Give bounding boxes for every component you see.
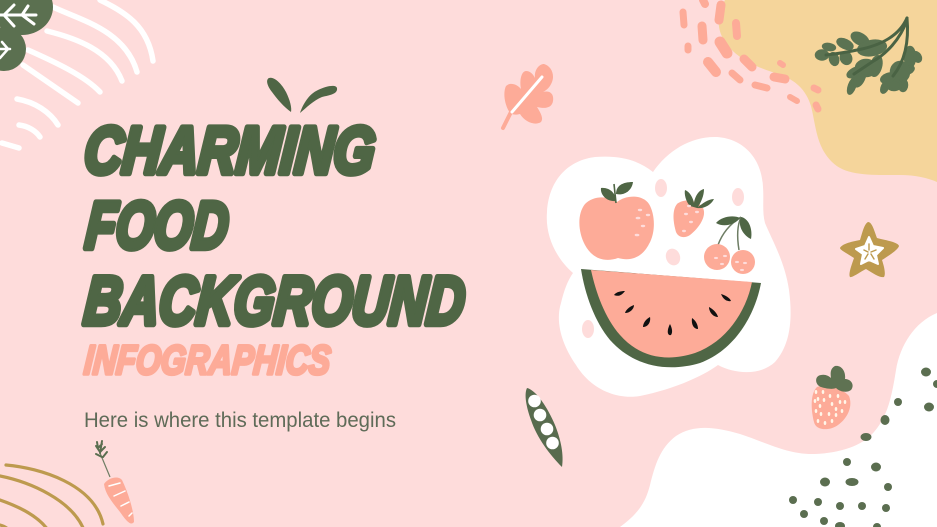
yellow corner blob — [719, 0, 937, 182]
title — [81, 114, 468, 339]
green dots — [789, 368, 937, 527]
icon: apple — [579, 182, 654, 260]
icon: carrot — [96, 441, 134, 524]
tagline: Here is where this template begins — [84, 409, 396, 432]
icon: sprout above title — [267, 78, 337, 113]
title: CHARMING — [82, 114, 378, 188]
white centre blob — [547, 137, 791, 397]
icon: salmon leaf — [503, 64, 553, 128]
title: FOOD — [83, 189, 231, 263]
icon: watermelon — [581, 269, 761, 367]
icon: cherries — [704, 216, 755, 274]
icon: top-left white arcs — [2, 0, 153, 148]
white bottom-right blob — [620, 313, 937, 527]
title: BACKGROUND — [81, 263, 468, 339]
icon: small strawberry — [674, 189, 714, 237]
icon: top-left leaves — [0, 0, 53, 71]
dashed salmon marks — [683, 0, 818, 109]
icon: large strawberry — [812, 366, 853, 429]
icon: pea pod — [526, 388, 563, 467]
icon: gold arcs — [0, 465, 103, 527]
subtitle: infographics: INFOGRAPHICS — [82, 337, 333, 383]
pale pink spots — [582, 179, 744, 338]
icon: green sprig — [816, 18, 923, 95]
icon: star fruit — [840, 222, 899, 277]
